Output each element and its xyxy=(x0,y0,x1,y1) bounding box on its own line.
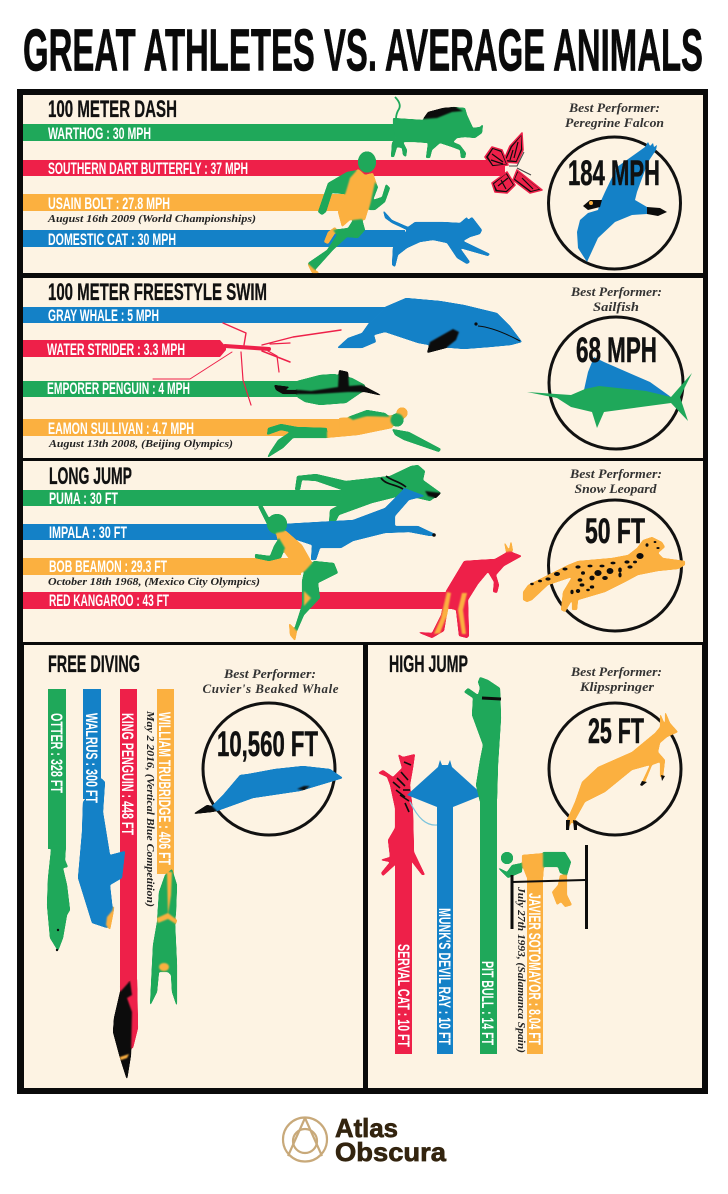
icon: atlas obscura emblem xyxy=(283,1118,327,1162)
labels: free diving bars: WALRUS : 300 FT xyxy=(82,713,101,803)
icon: puma xyxy=(295,465,441,523)
best performer: klipspringer: Best Performer: xyxy=(570,664,662,679)
best performer: cuvier's beaked whale: Cuvier's Beaked Whale xyxy=(202,681,339,696)
icon: usain bolt runner xyxy=(307,152,390,273)
best performer: cuvier's beaked whale: Best Performer: xyxy=(223,666,316,681)
bar: southern dart butterfly xyxy=(23,159,505,178)
panel: 100 meter freestyle swim xyxy=(23,278,703,458)
best performer: snow leopard: Best Performer: xyxy=(569,466,662,481)
date: javier sotomayor: July 27th 1993, (Salamanca Spain) xyxy=(515,886,526,1053)
icon: klipspringer xyxy=(566,711,678,830)
speed: 184 mph: 184 MPH xyxy=(568,154,660,193)
icon: water strider xyxy=(153,323,341,405)
heading: long jump: LONG JUMP xyxy=(49,463,132,490)
icon: otter xyxy=(43,833,70,951)
date: eamon sullivan: August 13th 2008, (Beijing Olympics) xyxy=(48,439,233,450)
best performer: cuvier's beaked whale: 10,560 FT xyxy=(217,725,318,764)
labels: high jump bars: PIT BULL : 14 FT xyxy=(478,961,497,1045)
icon: warthog xyxy=(391,97,483,158)
best performer: sailfish xyxy=(527,284,692,449)
bar: usain bolt: USAIN BOLT : 27.8 MPH xyxy=(48,194,170,213)
bar: eamon sullivan xyxy=(23,419,348,436)
labels: high jump bars: MUNK'S DEVIL RAY : 10 FT xyxy=(435,908,454,1045)
bar: william trubridge xyxy=(157,689,174,874)
labels: high jump bars xyxy=(394,893,544,1047)
icon: snow leopard xyxy=(523,537,685,612)
bar: water strider: WATER STRIDER : 3.3 MPH xyxy=(47,340,185,359)
bar: red kangaroo xyxy=(23,592,468,609)
icon: william trubridge diver xyxy=(150,869,177,1007)
wordmark: Atlas xyxy=(335,1113,398,1143)
icon: munk's devil ray xyxy=(407,760,483,807)
best performer: snow leopard: 50 FT xyxy=(585,512,645,551)
best performer: peregrine falcon xyxy=(548,100,680,269)
bar: munk's devil ray xyxy=(437,800,453,1054)
bar: pit bull xyxy=(480,765,497,1054)
date: usain bolt: August 16th 2009 (World Championships) xyxy=(47,214,256,225)
icon: domestic cat xyxy=(383,210,490,267)
bar: otter xyxy=(48,689,66,849)
icon: gray whale xyxy=(337,298,522,353)
bar: javier sotomayor xyxy=(527,875,543,1054)
icon: cuvier's beaked whale xyxy=(193,766,343,814)
date: bob beamon: October 18th 1968, (Mexico City Olympics) xyxy=(48,577,260,588)
icon: red kangaroo xyxy=(417,540,522,638)
bar: domestic cat xyxy=(23,230,405,249)
labels: high jump bars: JAVIER SOTOMAYOR : 8.04 FT xyxy=(525,893,544,1045)
logo: atlas obscura xyxy=(283,1113,447,1167)
icon: bob beamon jumper xyxy=(255,505,338,641)
icon: butterfly xyxy=(485,133,542,193)
icon: king penguin xyxy=(113,978,138,1080)
labels: free diving bars: OTTER : 328 FT xyxy=(47,713,66,793)
wordmark xyxy=(335,1113,447,1167)
icon: peregrine falcon xyxy=(577,142,667,262)
black frame xyxy=(17,89,708,1094)
labels: long jump bars xyxy=(49,489,169,610)
panel: high jump xyxy=(368,645,702,1088)
label: eamon sullivan: EAMON SULLIVAN : 4.7 MPH xyxy=(48,419,194,438)
high jump bar xyxy=(512,845,586,929)
date: william trubridge: May 2 2016, (Vertical Blue Competition) xyxy=(144,710,155,907)
speed: 68 mph: 68 MPH xyxy=(576,331,657,370)
heading: freestyle swim: 100 METER FREESTYLE SWIM xyxy=(48,279,267,306)
icon: eamon sullivan swimmer xyxy=(267,408,441,458)
bar: bob beamon xyxy=(23,558,301,575)
bar: warthog: WARTHOG : 30 MPH xyxy=(48,124,151,143)
best performer: peregrine falcon: Peregrine Falcon xyxy=(565,115,664,130)
bar: domestic cat: DOMESTIC CAT : 30 MPH xyxy=(48,230,176,249)
labels: free diving bars: WILLIAM TRUBRIDGE : 406 FT xyxy=(155,712,174,865)
bar: gray whale: GRAY WHALE : 5 MPH xyxy=(48,306,159,325)
best performer: klipspringer: Klipspringer xyxy=(579,679,655,694)
best performer: peregrine falcon: Best Performer: xyxy=(568,100,660,115)
labels: long jump bars: BOB BEAMON : 29.3 FT xyxy=(49,557,167,576)
panel: 100 meter dash xyxy=(23,95,703,273)
bar: usain bolt xyxy=(23,194,348,213)
best performer: sailfish: Best Performer: xyxy=(570,284,662,299)
icon: ray tail xyxy=(410,802,437,825)
labels: free diving bars: KING PENGUIN : 448 FT xyxy=(118,713,137,835)
icon: javier sotomayor jumper xyxy=(497,852,572,907)
icon: pit bull xyxy=(464,677,501,802)
bar: gray whale xyxy=(23,306,388,325)
icon: walrus xyxy=(78,778,125,930)
icon: serval cat xyxy=(378,754,425,876)
labels: high jump bars: SERVAL CAT : 10 FT xyxy=(394,944,413,1047)
labels: long jump bars: PUMA : 30 FT xyxy=(49,489,118,508)
icon: impala xyxy=(283,476,437,560)
wordmark: Obscura xyxy=(335,1137,447,1167)
bar: walrus xyxy=(83,689,101,799)
bar: emperor penguin: EMPORER PENGUIN : 4 MPH xyxy=(47,379,190,398)
heading: high jump: HIGH JUMP xyxy=(389,651,468,678)
icon: emperor penguin xyxy=(274,370,383,405)
bar: impala xyxy=(23,524,313,540)
panel: free diving xyxy=(24,645,363,1088)
best performer: klipspringer xyxy=(549,664,681,835)
bar: puma xyxy=(23,490,343,506)
labels: long jump bars: IMPALA : 30 FT xyxy=(49,523,127,542)
labels: long jump bars: RED KANGAROO : 43 FT xyxy=(49,591,169,610)
best performer: sailfish: Sailfish xyxy=(593,299,639,314)
bar: king penguin xyxy=(120,689,137,989)
best performer: snow leopard xyxy=(523,466,685,631)
bar: southern dart butterfly: SOUTHERN DART BUTTERFLY : 37 MPH xyxy=(48,159,248,178)
labels: free diving bars xyxy=(47,712,174,865)
heading: free diving: FREE DIVING xyxy=(48,651,140,678)
best performer: cuvier's beaked whale xyxy=(193,666,343,835)
bar: warthog xyxy=(23,124,398,143)
best performer: klipspringer: 25 FT xyxy=(588,712,644,751)
icon: sailfish xyxy=(527,357,692,428)
best performer: snow leopard: Snow Leopard xyxy=(574,481,657,496)
panel: long jump xyxy=(23,461,703,642)
bar: serval cat xyxy=(395,860,412,1054)
heading: 100 meter dash: 100 METER DASH xyxy=(48,96,177,123)
